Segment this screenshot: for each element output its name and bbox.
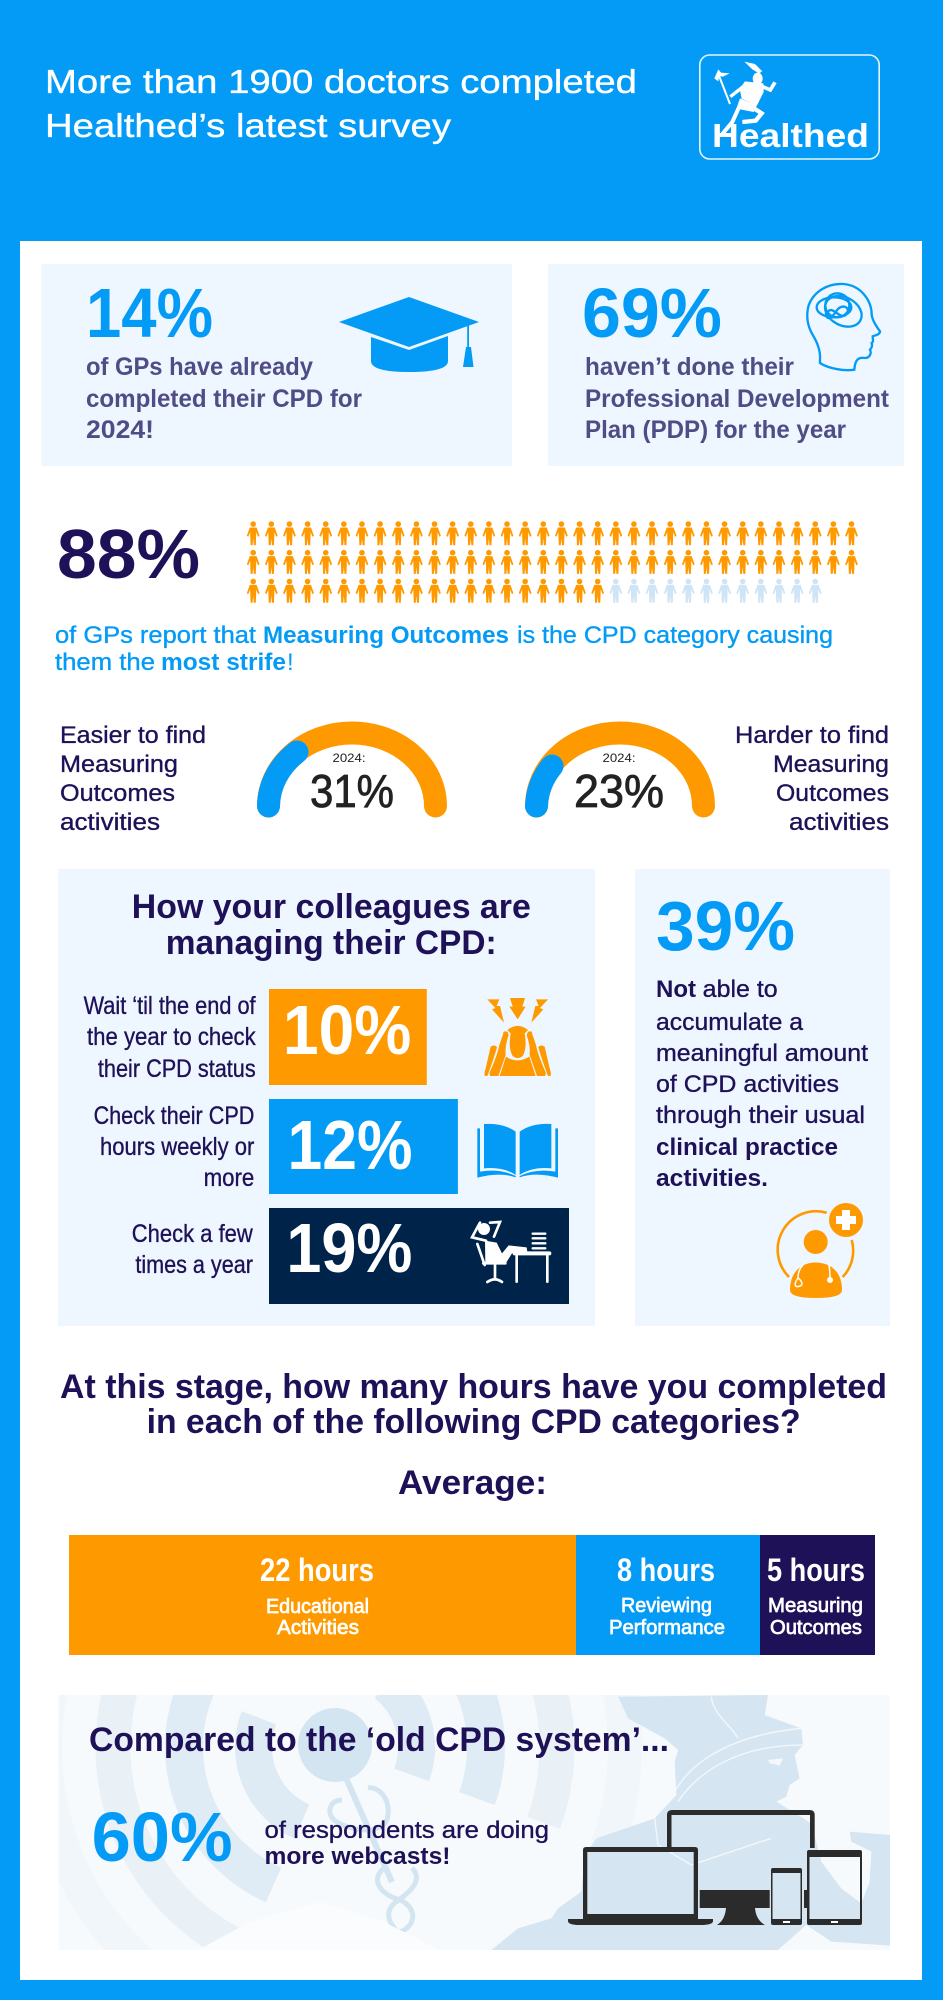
panel: compared to old CPD system	[58, 1695, 890, 1950]
segment: measuring outcomes: Measuring	[768, 1595, 863, 1617]
gauge: 23%: 2024:	[602, 751, 636, 765]
text: easier to find: Easier to find	[60, 722, 206, 749]
stacked bar: average hours	[69, 1535, 875, 1655]
text: harder to find: Outcomes	[776, 780, 889, 807]
segment: educational activities: Educational	[266, 1596, 369, 1618]
stat: 69%: 69%	[582, 274, 722, 352]
gauge: 23%: 23%	[574, 765, 664, 817]
text: more webcasts: of respondents are doing	[264, 1817, 549, 1844]
row: 12% weekly: Check their CPD	[94, 1102, 254, 1130]
text: measuring outcomes strife: most strife	[161, 649, 286, 676]
text: 69% description: Plan (PDP) for the year	[585, 416, 846, 444]
title	[45, 64, 637, 145]
text: harder to find	[735, 722, 889, 836]
row: 12% weekly	[94, 1099, 558, 1194]
background: Hermes silhouette	[491, 1695, 890, 1950]
stat: 39%: 39%	[656, 887, 795, 965]
text: easier to find: Outcomes	[60, 780, 175, 807]
background: rings and caduceus	[96, 1695, 574, 1947]
text: harder to find: Harder to find	[735, 722, 889, 749]
panel: how colleagues manage CPD	[58, 869, 595, 1326]
icon: open book	[477, 1124, 558, 1178]
logo: Healthed	[700, 55, 879, 159]
segment: reviewing performance: 8 hours	[617, 1552, 715, 1588]
row: 10% wait till end of year: their CPD status	[98, 1055, 256, 1083]
text: 39% description: activities.	[656, 1165, 768, 1192]
heading: hours question	[60, 1368, 887, 1441]
panel: 14% completed CPD	[42, 264, 512, 466]
text: 14% description	[86, 353, 362, 444]
row: 19% few times a year: Check a few	[132, 1220, 254, 1248]
text: easier to find: activities	[60, 809, 160, 836]
stat: 60%: 60%	[92, 1798, 233, 1876]
heading: How your colleagues are	[132, 888, 531, 926]
segment: measuring outcomes: 5 hours	[767, 1552, 865, 1588]
laptop	[568, 1847, 713, 1925]
gauge: 31%	[268, 733, 436, 817]
row: 10% wait till end of year	[84, 989, 551, 1085]
phone	[771, 1868, 802, 1925]
icon: devices	[568, 1810, 862, 1925]
text: 39% description	[656, 976, 868, 1192]
subheading: compared: Compared to the ‘old CPD system’...	[89, 1721, 669, 1759]
row: 12% weekly: 12%	[288, 1106, 412, 1184]
row: 19% few times a year	[132, 1208, 569, 1304]
text: 14% description: 2024!	[86, 416, 154, 444]
gauge: 31%: 2024:	[332, 751, 366, 765]
title: More than 1900 doctors completed	[45, 64, 637, 101]
icon: graduation cap	[339, 297, 479, 372]
segment: educational activities: Activities	[277, 1617, 359, 1639]
panel: 39% clinical practice	[635, 869, 890, 1326]
segment: reviewing performance: Performance	[609, 1617, 725, 1639]
text: more webcasts	[264, 1817, 549, 1870]
text: measuring outcomes strife: !	[287, 649, 294, 676]
text: 14% description: completed their CPD for	[86, 385, 362, 413]
tablet	[807, 1850, 862, 1925]
text: 39% description: through their usual	[656, 1102, 865, 1129]
row: 12% weekly: hours weekly or	[100, 1133, 254, 1161]
text: 69% description: Professional Development	[585, 385, 890, 413]
row: 19% few times a year: times a year	[135, 1251, 253, 1279]
segment: reviewing performance: Reviewing	[621, 1595, 712, 1617]
icon: relaxed person at desk	[472, 1222, 549, 1282]
row: 12% weekly: more	[204, 1164, 254, 1192]
heading: average: Average:	[398, 1464, 547, 1502]
icon: stressed person	[484, 998, 551, 1076]
text: measuring outcomes strife	[55, 622, 833, 676]
segment: measuring outcomes	[760, 1535, 875, 1655]
heading	[132, 888, 531, 962]
panel: 69% no PDP	[548, 264, 904, 466]
segment: educational activities	[69, 1535, 576, 1655]
text: harder to find: Measuring	[773, 751, 889, 778]
segment: measuring outcomes: Outcomes	[770, 1617, 862, 1639]
logo: Healthed: Healthed	[712, 117, 869, 154]
monitor	[667, 1810, 815, 1925]
text: measuring outcomes strife: is the CPD category causing	[517, 622, 833, 649]
heading: hours question: in each of the following CPD categories?	[147, 1403, 801, 1441]
icon: head with tangled brain	[807, 284, 880, 370]
row: 10% wait till end of year: the year to check	[87, 1023, 256, 1051]
text: 39% description: clinical practice	[656, 1134, 838, 1161]
text: easier to find: Measuring	[60, 751, 178, 778]
text: 14% description: of GPs have already	[86, 353, 313, 381]
heading: managing their CPD:	[166, 924, 497, 962]
text: 39% description: able to	[703, 976, 778, 1003]
text: measuring outcomes strife: them the	[55, 649, 155, 676]
text: 69% description	[585, 353, 890, 444]
segment: reviewing performance	[576, 1535, 760, 1655]
text: 39% description: meaningful amount	[656, 1040, 868, 1067]
stat: 14%: 14%	[86, 274, 213, 352]
row: 10% wait till end of year: Wait ‘til the end of	[84, 992, 256, 1020]
pictogram: 88 of 100 people	[247, 521, 858, 603]
row: 19% few times a year: 19%	[286, 1209, 412, 1287]
text: measuring outcomes strife: Measuring Outcomes	[263, 622, 509, 649]
text: 69% description: haven’t done their	[585, 353, 794, 381]
title: Healthed’s latest survey	[45, 108, 451, 145]
icon: doctor with plus	[778, 1203, 863, 1298]
text: 39% description: accumulate a	[656, 1009, 804, 1036]
heading: hours question: At this stage, how many hours have you completed	[60, 1368, 887, 1406]
text: easier to find	[60, 722, 206, 836]
text: measuring outcomes strife: of GPs report that	[55, 622, 256, 649]
text: more webcasts: more webcasts!	[264, 1843, 450, 1870]
segment: educational activities: 22 hours	[260, 1552, 374, 1588]
gauge: 31%: 31%	[310, 765, 394, 817]
text: 39% description: Not	[656, 976, 696, 1003]
stat: 88%: 88%	[57, 515, 200, 593]
text: harder to find: activities	[789, 809, 889, 836]
gauge: 23%	[536, 733, 704, 817]
text: 39% description: of CPD activities	[656, 1071, 839, 1098]
row: 10% wait till end of year: 10%	[283, 991, 411, 1069]
